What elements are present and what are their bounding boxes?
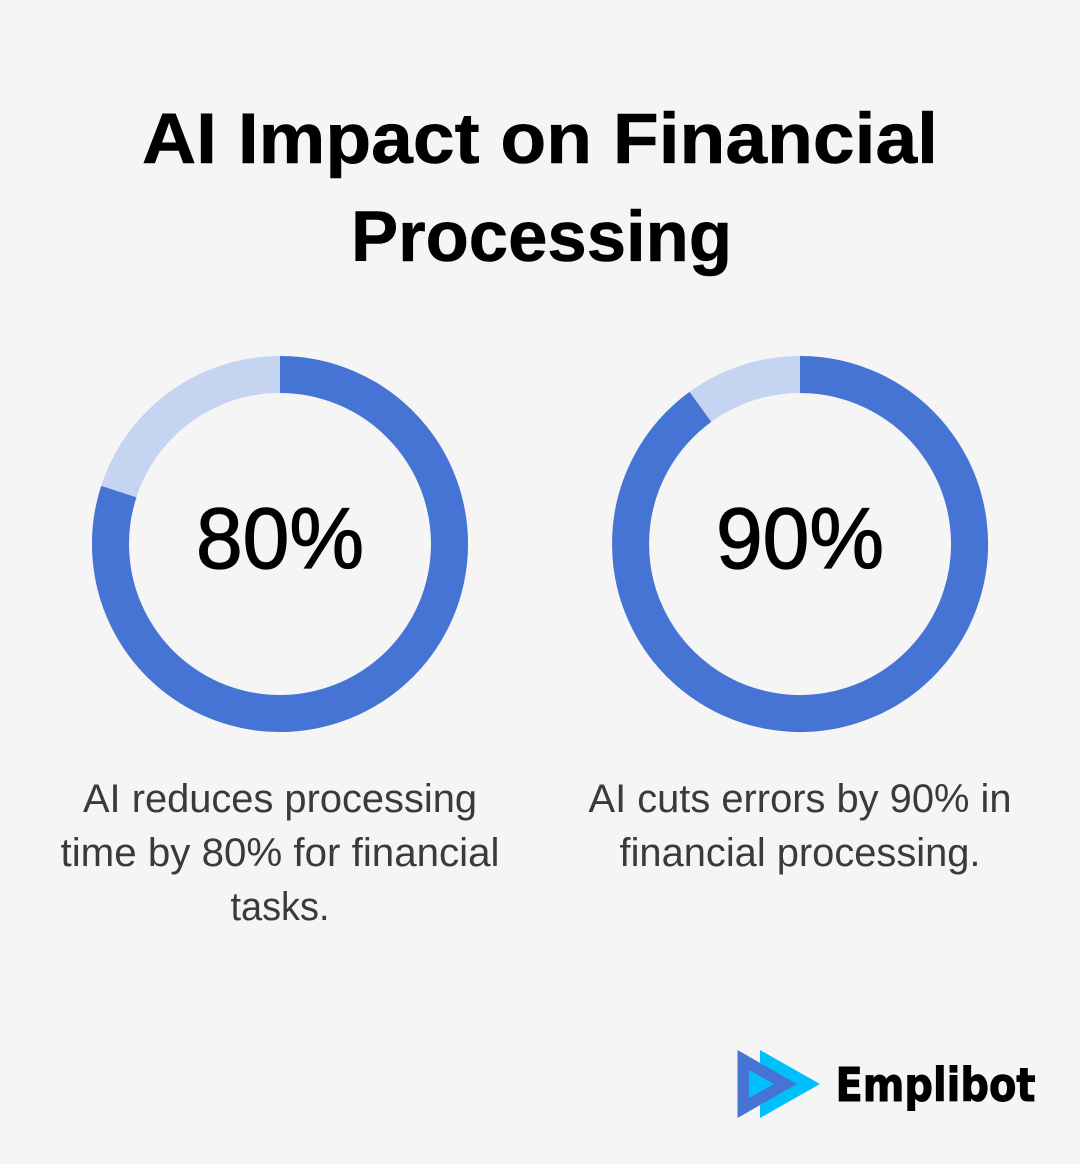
donut chart: 90% bbox=[630, 374, 970, 714]
donut chart: 80% bbox=[110, 374, 449, 714]
description: 80%: AI reduces processing bbox=[83, 777, 477, 821]
icon: play triangles bbox=[738, 1050, 820, 1118]
value: 80%: 80% bbox=[196, 491, 364, 587]
description: 90% bbox=[588, 777, 1012, 875]
logo: Emplibot bbox=[738, 1050, 1036, 1118]
description: 80%: tasks. bbox=[230, 885, 330, 929]
description: 80% bbox=[60, 777, 500, 929]
title: Processing bbox=[351, 198, 732, 277]
description: 90%: financial processing. bbox=[620, 831, 980, 875]
description: 80%: time by 80% for financial bbox=[60, 831, 500, 875]
wordmark: Emplibot bbox=[836, 1058, 1036, 1112]
title bbox=[142, 100, 938, 277]
panel: 90% stat bbox=[588, 374, 1012, 875]
panel: 80% stat bbox=[60, 374, 500, 929]
description: 90%: AI cuts errors by 90% in bbox=[588, 777, 1012, 821]
title: AI Impact on Financial bbox=[142, 100, 938, 179]
value: 90%: 90% bbox=[716, 491, 884, 587]
